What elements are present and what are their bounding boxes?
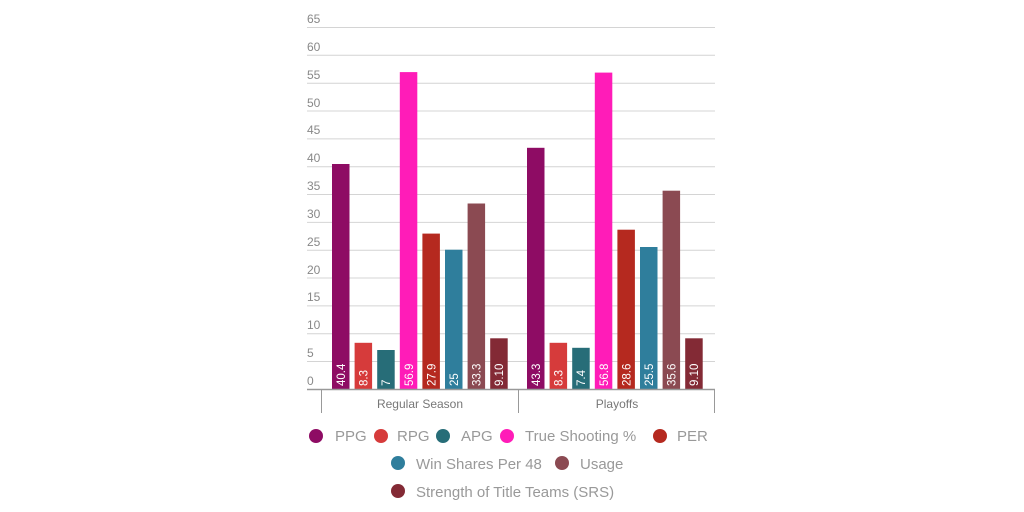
bars: Playoffs — [527, 73, 703, 389]
y axis gridlines and labels: 0 — [307, 374, 314, 388]
y axis gridlines and labels: 55 — [307, 68, 321, 82]
legend: True Shooting % — [525, 428, 636, 445]
legend: PER — [677, 428, 708, 445]
bars: Regular Season: 7 — [381, 380, 393, 386]
y axis gridlines and labels: 35 — [307, 179, 321, 193]
legend: APG — [461, 428, 493, 445]
bars: Regular Season: 27.9 — [426, 364, 438, 386]
y axis gridlines and labels: 50 — [307, 96, 321, 110]
bars: Playoffs: 8.3 — [554, 370, 566, 386]
bars: Playoffs: 56.8 — [599, 364, 611, 386]
bars: Regular Season: 40.4 — [336, 363, 348, 386]
legend: PPG — [335, 428, 367, 445]
legend: Win Shares Per 48 — [416, 456, 542, 473]
y axis gridlines and labels: 15 — [307, 290, 321, 304]
y axis gridlines and labels: 60 — [307, 40, 321, 54]
bars: Regular Season — [332, 72, 508, 389]
x axis with category labels: Regular Season — [377, 397, 463, 411]
y axis gridlines and labels: 5 — [307, 346, 314, 360]
bars: Playoffs: 35.6 — [667, 364, 679, 386]
legend: RPG — [397, 428, 430, 445]
y axis gridlines and labels: 45 — [307, 123, 321, 137]
y axis gridlines and labels — [307, 12, 715, 388]
bars: Playoffs: 28.6 — [621, 364, 633, 386]
x axis with category labels: Playoffs — [596, 397, 638, 411]
y axis gridlines and labels: 65 — [307, 12, 321, 26]
y axis gridlines and labels: 25 — [307, 235, 321, 249]
bars: Regular Season: 25 — [449, 373, 461, 386]
legend: Strength of Title Teams (SRS) — [416, 484, 614, 501]
legend — [309, 428, 708, 501]
x axis with category labels — [307, 389, 715, 413]
bars: Playoffs: 25.5 — [644, 364, 656, 386]
bars: Playoffs: 9.10 — [689, 364, 701, 386]
bars: Regular Season: 8.3 — [359, 370, 371, 386]
bars: Regular Season: 9.10 — [494, 364, 506, 386]
bars: Playoffs: 7.4 — [576, 369, 588, 386]
y axis gridlines and labels: 20 — [307, 263, 321, 277]
bars: Regular Season: 56.9 — [404, 364, 416, 386]
legend: Usage — [580, 456, 623, 473]
bars: Playoffs: 43.3 — [531, 364, 543, 386]
y axis gridlines and labels: 30 — [307, 207, 321, 221]
y axis gridlines and labels: 10 — [307, 318, 321, 332]
y axis gridlines and labels: 40 — [307, 151, 321, 165]
bars: Regular Season: 33.3 — [472, 364, 484, 386]
